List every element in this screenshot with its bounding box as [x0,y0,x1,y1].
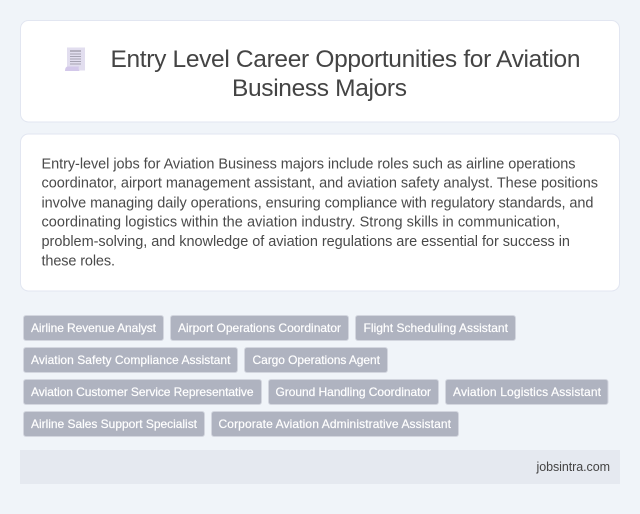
tag: Aviation Safety Compliance Assistant: Aviation Safety Compliance Assistant [31,353,231,367]
tag: Airport Operations Coordinator [170,316,348,340]
tag: Corporate Aviation Administrative Assistant: Corporate Aviation Administrative Assistant [218,417,452,431]
text block: description paragraph: coordinator, airport management assistant, and aviation safety analyst. These positions [42,176,598,192]
heading: Business Majors [232,75,407,102]
tag: Aviation Logistics Assistant: Aviation Logistics Assistant [453,385,602,399]
tag: Aviation Customer Service Representative: Aviation Customer Service Representative [31,385,254,399]
tag: Aviation Safety Compliance Assistant [24,348,238,372]
text block: description paragraph: coordinating logistics within the aviation industry. Strong skills in communication, [42,214,560,230]
icon: paper scroll document [65,48,85,71]
text block: description paragraph [42,156,598,269]
tag: Corporate Aviation Administrative Assistant [212,412,458,436]
tag: Flight Scheduling Assistant: Flight Scheduling Assistant [364,321,509,335]
heading [110,46,580,102]
heading: Entry Level Career Opportunities for Aviation [110,46,580,73]
tag: Aviation Customer Service Representative [24,380,262,404]
text block: description paragraph: these roles. [42,253,115,269]
tag: Ground Handling Coordinator [268,380,438,404]
tag: Airline Revenue Analyst: Airline Revenue Analyst [31,321,157,335]
tag: Ground Handling Coordinator: Ground Handling Coordinator [276,385,431,399]
text block: description paragraph: involve managing daily operations, ensuring compliance with regulatory standards, and [42,195,594,211]
panel: title header [20,20,620,122]
footer source text: jobsintra.com [536,460,610,474]
panel: description [20,134,620,291]
text block: description paragraph: Entry-level jobs for Aviation Business majors include roles such as airline operations [42,156,576,172]
tag: Airline Revenue Analyst [24,316,164,340]
tag: Flight Scheduling Assistant [356,316,516,340]
tag: Airport Operations Coordinator: Airport Operations Coordinator [178,321,341,335]
text block: description paragraph: problem-solving, and knowledge of aviation regulations are essential for success in [42,234,570,250]
tag: Cargo Operations Agent: Cargo Operations Agent [252,353,381,367]
footer [20,450,620,484]
tag: Airline Sales Support Specialist [24,412,204,436]
tag: Airline Sales Support Specialist: Airline Sales Support Specialist [31,417,198,431]
tag list: career roles [24,316,608,436]
tag: Cargo Operations Agent [244,348,388,372]
tag: Aviation Logistics Assistant [446,380,608,404]
